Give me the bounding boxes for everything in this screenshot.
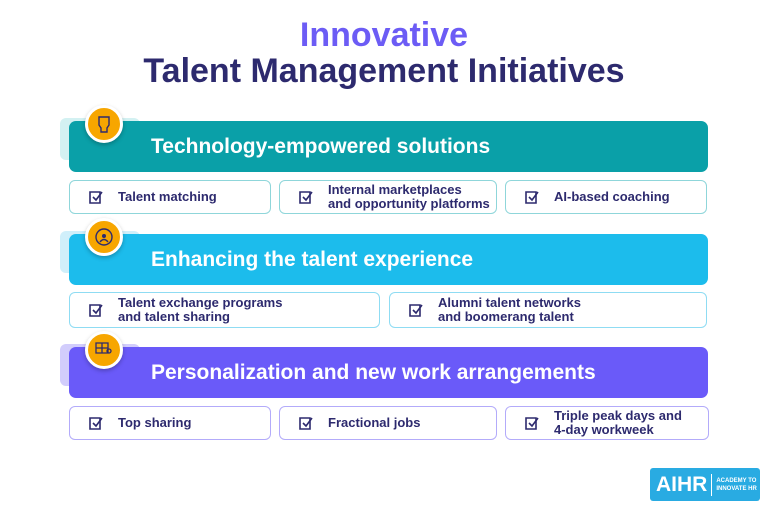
panel: personalization [60,333,709,440]
item: top sharing [69,406,271,440]
title: Talent Management Initiatives [143,52,625,90]
logo: ACADEMY TO [716,478,756,484]
item: top sharing: Top sharing [118,415,191,430]
heading: experience [69,234,708,285]
logo: AIHR [656,472,707,496]
logo [650,468,760,501]
title: Innovative [300,16,468,54]
panel: technology [60,107,708,214]
heading: personalization: Personalization and new work arrangements [151,361,596,384]
item: marketplaces: Internal marketplaces [328,182,462,197]
heading: personalization [69,347,708,398]
heading: technology [69,121,708,172]
item: alumni: and boomerang talent [438,309,574,324]
icon: video people [85,331,123,369]
logo: INNOVATE HR [716,486,757,492]
title [143,16,625,90]
item: triple peak: 4-day workweek [554,422,654,437]
heading: experience: Enhancing the talent experience [151,248,473,271]
item: exchange [69,292,380,328]
item: talent matching [69,180,271,214]
item: alumni: Alumni talent networks [438,295,581,310]
panel: experience [60,220,708,328]
item: AI coaching [505,180,707,214]
icon: fist [85,105,123,143]
item: marketplaces: and opportunity platforms [328,196,490,211]
item: fractional: Fractional jobs [328,415,420,430]
item: AI coaching: AI-based coaching [554,189,670,204]
item: alumni [389,292,707,328]
item: triple peak: Triple peak days and [554,408,682,423]
item: exchange: Talent exchange programs [118,295,282,310]
item: exchange: and talent sharing [118,309,230,324]
item: marketplaces [279,180,497,214]
icon: star person [85,218,123,256]
item: fractional [279,406,497,440]
heading: technology: Technology-empowered solutions [151,135,490,158]
item: talent matching: Talent matching [118,189,217,204]
item: triple peak [505,406,709,440]
